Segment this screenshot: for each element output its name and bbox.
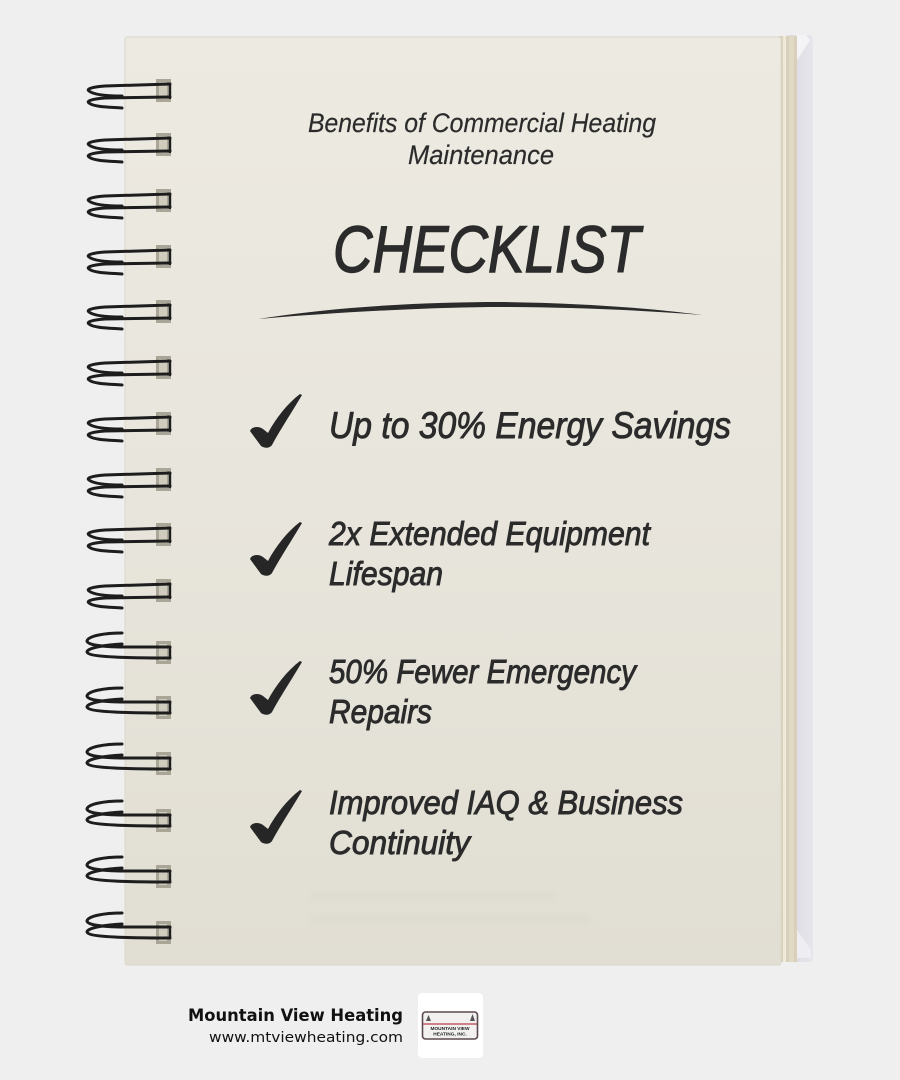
- page edges: [778, 36, 797, 962]
- icon: check mark 1: [250, 394, 302, 448]
- checklist item 3: [250, 653, 638, 730]
- checklist item 1: [250, 394, 731, 448]
- subtitle: [308, 108, 656, 170]
- icon: check mark 2: [250, 522, 302, 576]
- brand name and website: www.mtviewheating.com: [209, 1030, 403, 1046]
- icon: check mark 4: [250, 790, 302, 844]
- spiral binding: [87, 79, 171, 944]
- logo: HEATING, INC.: [433, 1032, 467, 1038]
- notebook back cover: [785, 35, 813, 962]
- checklist item 2: Lifespan: [329, 555, 443, 592]
- checklist item 2: [250, 515, 652, 592]
- checklist item 4: Improved IAQ & Business: [329, 784, 683, 821]
- checklist item 1: Up to 30% Energy Savings: [329, 405, 731, 446]
- checklist item 3: 50% Fewer Emergency: [329, 653, 638, 690]
- checklist item 4: Continuity: [329, 824, 472, 861]
- notebook page: [125, 37, 781, 965]
- subtitle: Maintenance: [408, 140, 554, 170]
- brand name and website: Mountain View Heating: [188, 1006, 403, 1026]
- faint bleed-through text: [310, 892, 590, 924]
- checklist item 4: [250, 784, 683, 861]
- logo: MOUNTAIN VIEW: [430, 1026, 470, 1032]
- title underline: [258, 302, 702, 319]
- checklist item 2: 2x Extended Equipment: [328, 515, 652, 552]
- subtitle: Benefits of Commercial Heating: [308, 108, 656, 138]
- logo: [418, 993, 483, 1058]
- brand name and website: [188, 1006, 403, 1046]
- checklist item 3: Repairs: [329, 693, 432, 730]
- title: CHECKLIST: [333, 212, 644, 286]
- icon: check mark 3: [250, 661, 302, 715]
